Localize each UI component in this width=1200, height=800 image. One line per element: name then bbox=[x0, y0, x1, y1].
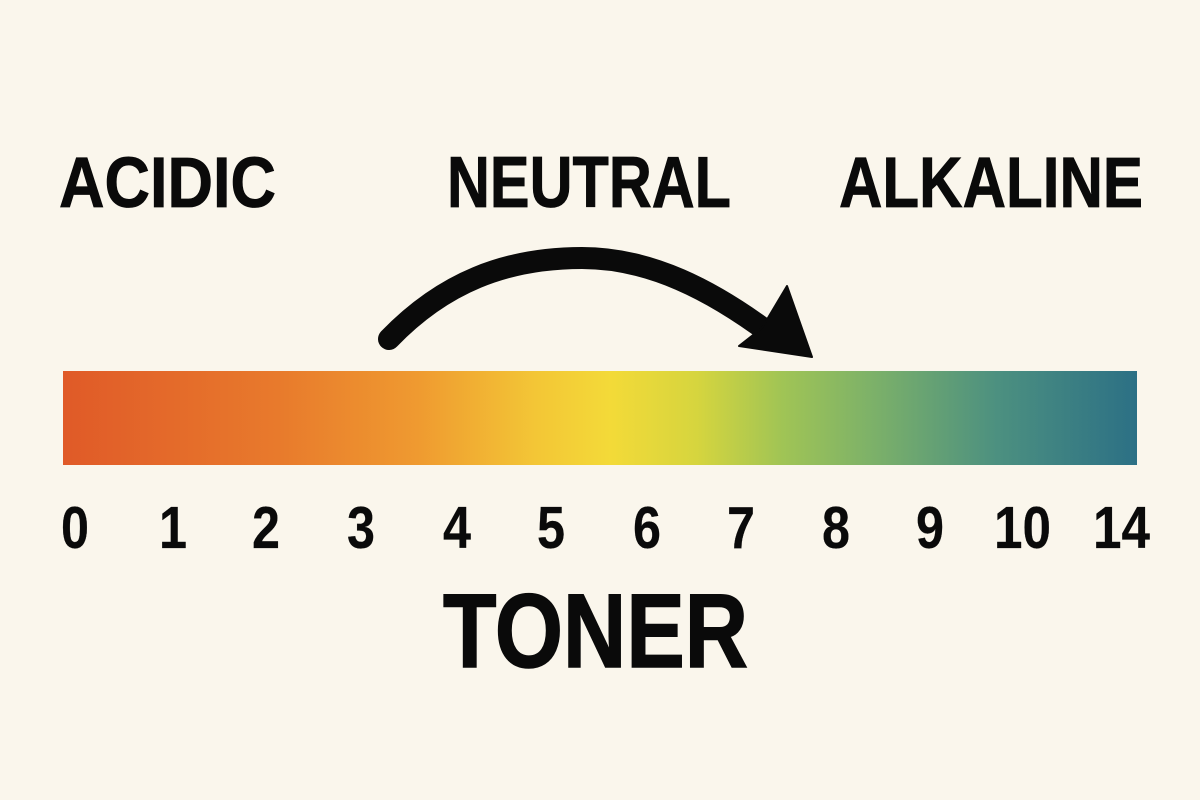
scale numbers: 0 bbox=[61, 495, 89, 561]
scale numbers: 4 bbox=[443, 495, 471, 561]
scale numbers: 8 bbox=[822, 495, 850, 561]
scale numbers: 14 bbox=[1093, 495, 1150, 561]
scale numbers: 2 bbox=[252, 495, 280, 561]
scale numbers: 1 bbox=[159, 495, 187, 561]
scale numbers: 7 bbox=[727, 495, 755, 561]
pH gradient bar bbox=[63, 371, 1137, 465]
scale numbers: 10 bbox=[994, 495, 1051, 561]
scale numbers: 5 bbox=[537, 495, 565, 561]
title: toner: TONER bbox=[443, 573, 748, 690]
arrow: curved from acidic toward alkaline bbox=[389, 258, 812, 357]
scale numbers: 9 bbox=[916, 495, 944, 561]
label: neutral: NEUTRAL bbox=[447, 143, 731, 223]
scale numbers: 6 bbox=[633, 495, 661, 561]
scale numbers: 3 bbox=[347, 495, 375, 561]
scale numbers bbox=[61, 495, 1150, 561]
label: acidic: ACIDIC bbox=[59, 144, 276, 223]
label: alkaline: ALKALINE bbox=[839, 144, 1143, 223]
